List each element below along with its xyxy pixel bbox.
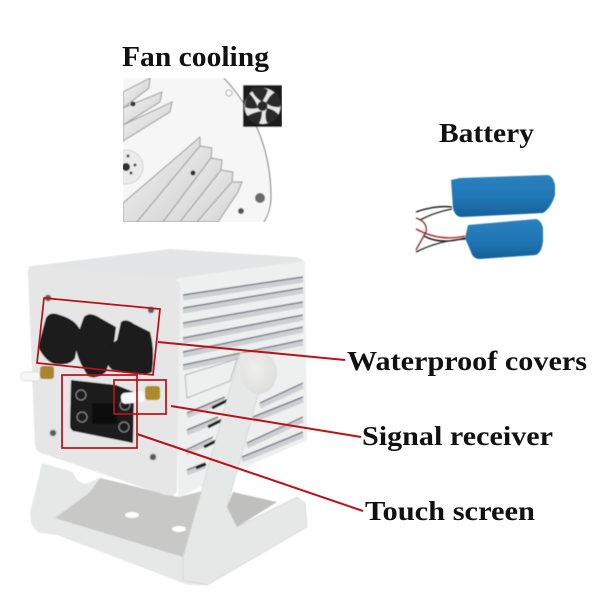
top face (28, 249, 305, 280)
box: waterproof covers (37, 298, 160, 375)
left connector (21, 366, 54, 381)
center hub (123, 149, 144, 185)
box: touch screen (62, 375, 137, 448)
red highlight boxes (37, 298, 166, 448)
battery large (451, 175, 555, 217)
label: Signal receiver: Signal receiver (362, 421, 553, 451)
front face (28, 266, 180, 495)
label: Waterproof covers: Waterproof covers (347, 346, 587, 376)
heading: Battery: Battery (439, 118, 535, 148)
vents (183, 277, 303, 473)
heading: Fan cooling: Fan cooling (122, 41, 269, 73)
base (30, 463, 277, 585)
side face (178, 261, 307, 497)
box: signal receiver (114, 380, 166, 414)
screws (44, 294, 156, 460)
label: Touch screen: Touch screen (365, 496, 535, 526)
icon: fan (243, 85, 282, 127)
battery wires (416, 207, 466, 252)
stand arm (183, 352, 307, 585)
waterproof covers (38, 314, 153, 377)
arrow: touch screen line (137, 434, 363, 511)
photo: heat sink with fan (109, 78, 282, 222)
battery small (465, 219, 543, 259)
product: light unit (21, 249, 307, 585)
photo: battery packs (416, 175, 555, 259)
touch screen panel (70, 380, 134, 443)
signal receiver connector (121, 386, 160, 404)
knob (241, 352, 277, 394)
arrow: signal receiver line (171, 406, 361, 437)
arrow: waterproof covers line (158, 342, 345, 360)
